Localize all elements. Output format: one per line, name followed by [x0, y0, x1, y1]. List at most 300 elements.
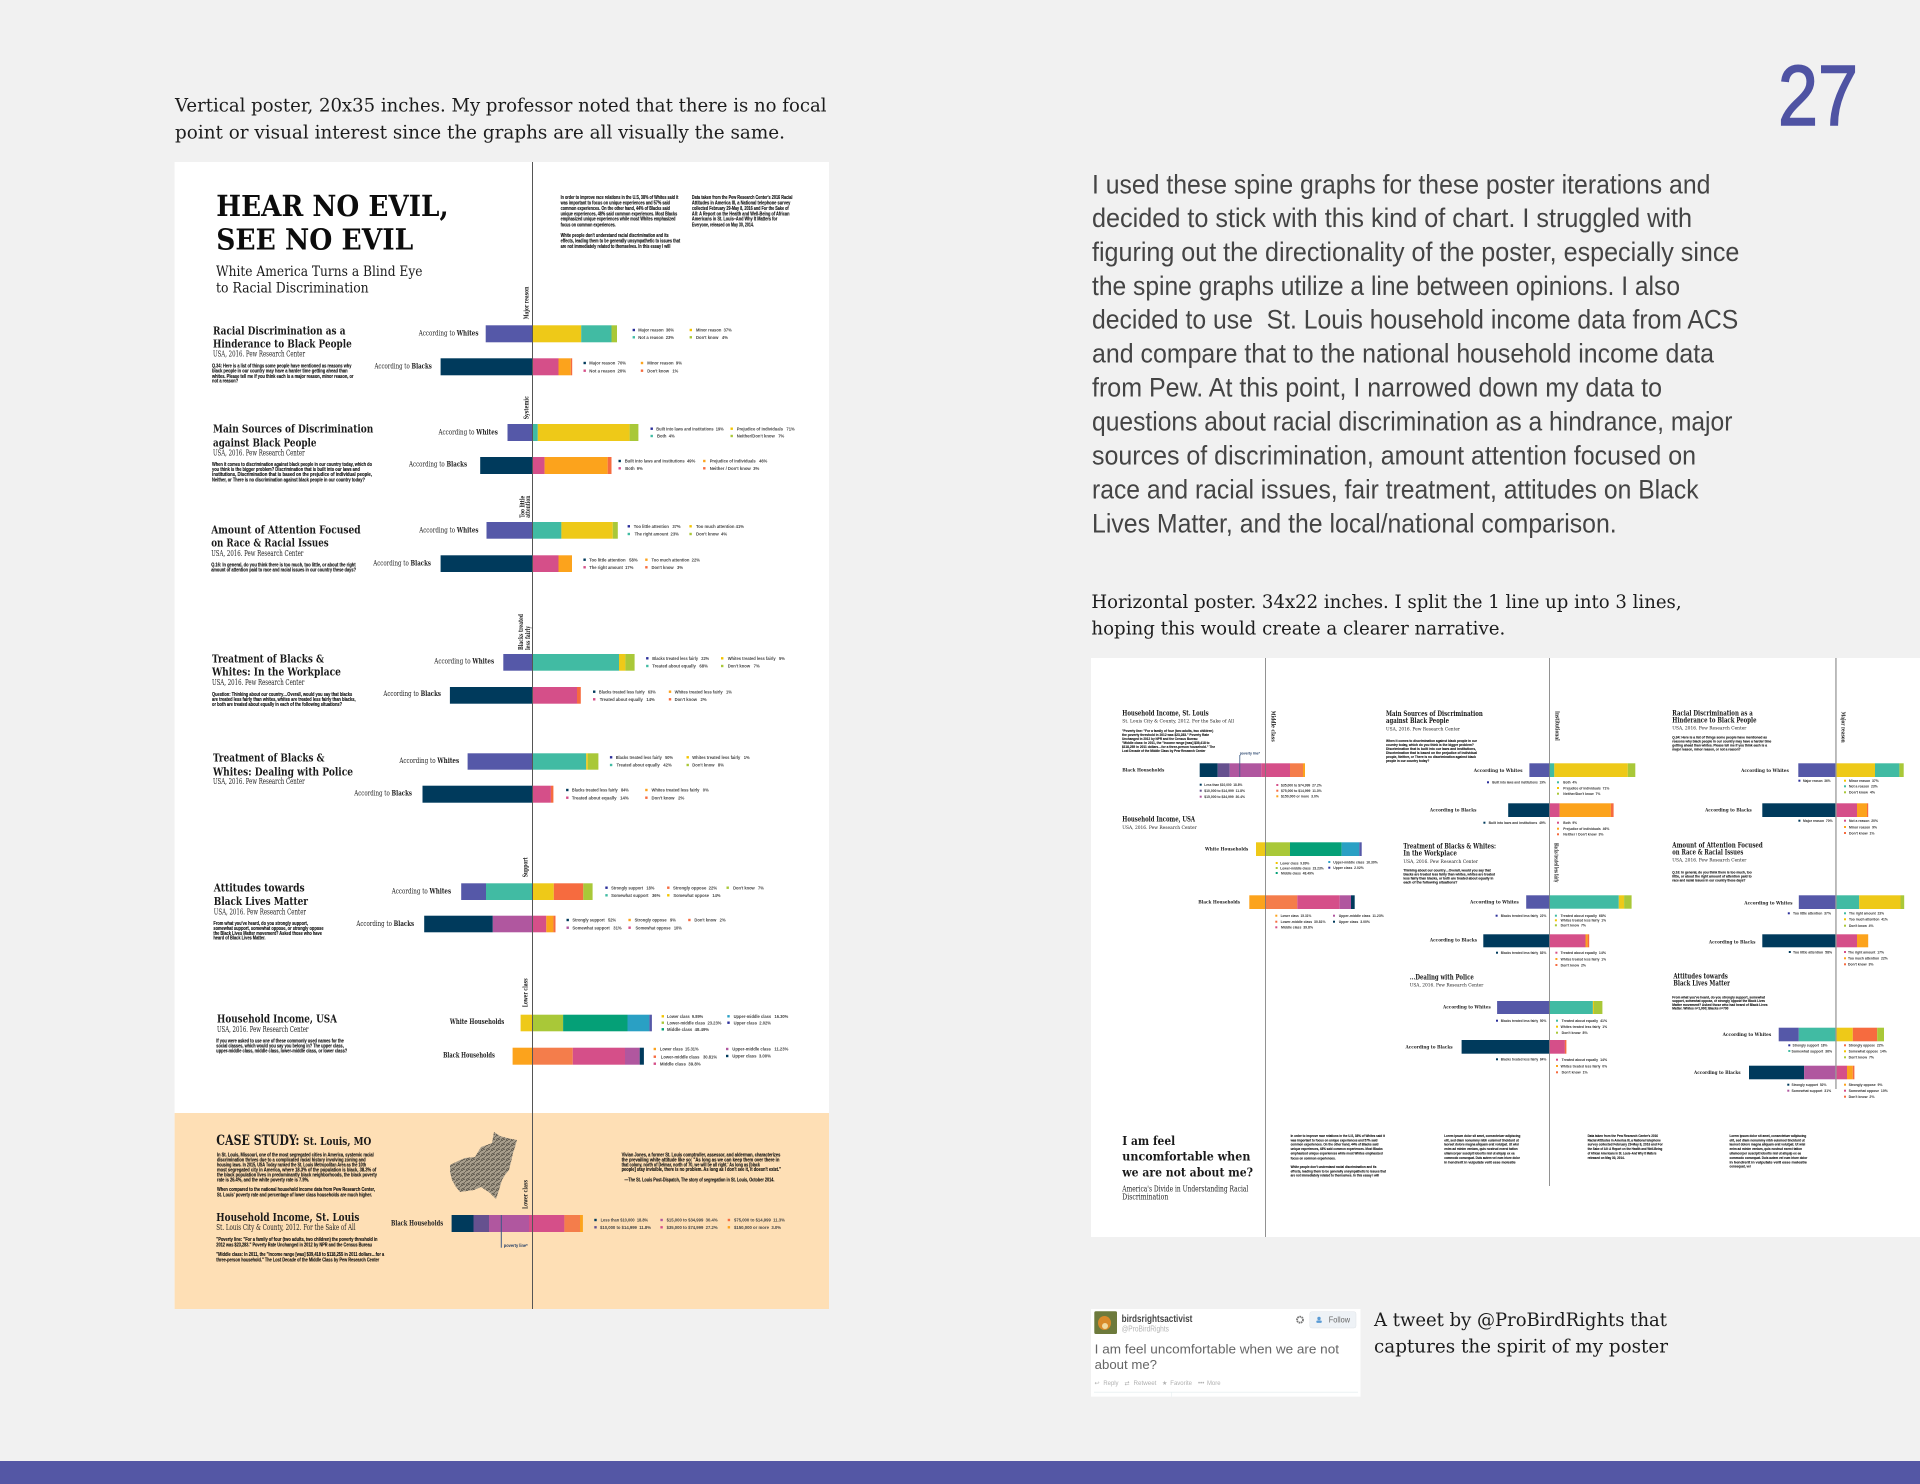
text column 2: enim ad minim veniam, quis nostrud exerci tation: [1444, 1147, 1518, 1151]
text column 1: are not immediately related to themselves. In this essay I will: [1291, 1174, 1379, 1178]
bar: according to whites: According to Whites: [1469, 900, 1519, 906]
st louis heading: [216, 1211, 359, 1232]
text column 3: released on May 30, 2014.: [1588, 1156, 1625, 1160]
question text: Matter. Whites n=1,000; Blacks n=700: [1672, 1007, 1728, 1011]
legend: whites: [633, 328, 732, 340]
heading: USA, 2016. Pew Research Center: [1410, 983, 1484, 989]
question text: From what you've heard, do you strongly support,: [213, 921, 308, 927]
bar: according to whites: [1740, 763, 1904, 777]
icon: settings gear: [1297, 1317, 1303, 1323]
tweet card: [1091, 1309, 1360, 1397]
question text: social classes, which would you say you belong in? The upper class,: [216, 1044, 344, 1050]
question text: From what you've heard, do you strongly support, somewhat: [1672, 995, 1766, 999]
heading: USA, 2016. Pew Research Center: [1672, 726, 1747, 732]
legend: blacks: Blacks treated less fairly 84%: [1501, 1058, 1546, 1062]
question text: [212, 462, 373, 483]
heading: Hinderance to Black People: [1672, 716, 1757, 725]
legend: blacks: Don't know 1%: [647, 368, 678, 373]
legend: blacks: Too little attention 58%: [589, 557, 638, 562]
bar: according to whites: [1469, 895, 1632, 909]
heading: USA, 2016. Pew Research Center: [211, 549, 304, 558]
intro text columns: emphasized unique experiences while most Whites emphasized: [561, 217, 676, 223]
question text: people, Neither, or There is no discrimination against black: [1386, 755, 1476, 759]
legend: whites: Whites treated less fairly 1%: [692, 755, 750, 760]
st louis heading: Household Income, St. Louis: [216, 1211, 359, 1224]
bar: according to blacks: According to Blacks: [1708, 939, 1756, 945]
bar: according to whites: [1442, 1001, 1602, 1014]
legend: blacks: Treated about equally 14%: [600, 697, 655, 702]
legend: blacks: Treated about equally 14%: [1562, 1058, 1607, 1062]
spine label: less fairly: [524, 626, 532, 650]
legend: whites: Don't know 4%: [696, 532, 727, 537]
horizontal poster title: Discrimination: [1122, 1192, 1168, 1201]
legend: black households: [1275, 914, 1384, 930]
legend: blacks: Major reason 70%: [1803, 819, 1833, 823]
legend: whites: Prejudice of individuals 71%: [1563, 786, 1609, 790]
legend: whites: Treated about equally 42%: [616, 763, 672, 768]
caption: vertical poster: Vertical poster, 20x35 inches. My professor noted that there is no focal: [174, 95, 826, 117]
legend: blacks: Strongly oppose 9%: [635, 918, 676, 923]
question text: When it comes to discrimination against black people in our: [1386, 739, 1478, 743]
case study text: the black population lives in predominantly black neighborhoods, the black poverty: [217, 1172, 377, 1178]
question text: reasons why black people in our country may have a harder time: [1672, 740, 1771, 744]
legend: whites: [628, 524, 744, 537]
case study text: discrimination thrives due to a complicated racial history involving zoning and: [217, 1157, 366, 1163]
bar: according to blacks: According to Blacks: [1429, 808, 1477, 814]
legend: blacks: Don't know 1%: [1849, 831, 1874, 835]
case study text: most segregated city in America, where 18.3% of the population is black, 38.3% of: [217, 1167, 376, 1173]
caption: vertical poster: [174, 95, 826, 143]
legend: whites: Don't know 4%: [1849, 791, 1875, 795]
text block: process description: from Pew. At this point, I narrowed down my data to: [1092, 373, 1662, 403]
intro text columns: focus on common experiences.: [561, 222, 616, 228]
legend: st louis: $10,000 to $14,999 11.8%: [1204, 789, 1245, 793]
legend: whites: Too much attention 41%: [1849, 918, 1888, 922]
spine label: Support: [522, 857, 530, 877]
question text: Q.34: Here is a list of things some people have mentioned as reasons why: [212, 364, 352, 370]
question text: Matter movement? Asked those who had heard of Black Lives: [1672, 1003, 1768, 1007]
intro text columns: [560, 195, 793, 250]
heading: usa: [1122, 815, 1197, 831]
legend: whites: Blacks treated less fairly 22%: [1501, 914, 1546, 918]
text block: process description: figuring out the directionality of the poster, especially since: [1092, 237, 1739, 267]
bar: according to whites: According to Whites: [1743, 900, 1793, 906]
legend: black households: Upper class 3.00%: [1339, 920, 1370, 924]
text column 1: was important to focus on unique experiences and 57% said: [1290, 1138, 1378, 1142]
bar: according to blacks: According to Blacks: [1429, 938, 1477, 944]
panel: horizontal poster: [1091, 658, 1920, 1237]
question text: major reason, minor reason, or not a reason?: [1672, 748, 1741, 752]
heading: Household Income, USA: [217, 1013, 337, 1026]
tweet actions: •••: [1198, 1381, 1204, 1387]
legend: whites: [1788, 912, 1888, 928]
text column 2: elit, sed diam nonummy nibh euismod tincidunt ut: [1444, 1138, 1519, 1142]
legend: whites: [1788, 1044, 1887, 1060]
legend: whites: Both 4%: [657, 434, 675, 439]
chart: amount of attention: [210, 496, 744, 573]
legend: blacks: Somewhat support 31%: [1792, 1089, 1831, 1093]
legend: blacks: Too little attention 58%: [1793, 950, 1832, 954]
legend: blacks: [583, 557, 700, 570]
bar: st louis: Black Households: [1122, 767, 1164, 773]
legend: white households: [662, 1014, 788, 1032]
legend: blacks: Blacks treated less fairly 63%: [599, 689, 656, 694]
legend: whites: Don't know 8%: [1562, 1031, 1588, 1035]
bar: white households: White Households: [1204, 847, 1248, 853]
legend: whites: [1487, 781, 1609, 796]
bar: black households: Black Households: [1198, 900, 1240, 906]
question text: If you were asked to use one of these commonly used names for the: [216, 1039, 344, 1045]
heading: Racial Discrimination as a: [1672, 708, 1753, 717]
legend: blacks: Not a reason 20%: [589, 368, 626, 373]
icon: bird avatar: [1094, 1311, 1117, 1334]
chart: dealing with police: [212, 751, 750, 803]
question text: When it comes to discrimination against black people in our country today, which do: [212, 462, 372, 468]
tweet actions: Reply: [1103, 1381, 1118, 1387]
heading: St. Louis City & County, 2012. For the Sake of All: [1122, 719, 1234, 725]
intro text columns: are not immediately related to themselves. In this essay I will: [561, 244, 671, 250]
footer band: [0, 1461, 1920, 1484]
legend: whites: [1496, 914, 1606, 928]
bar: according to blacks: [1429, 803, 1614, 817]
intro text columns: White people don't understand racial discrimination and its: [561, 233, 669, 239]
bar: according to blacks: [408, 457, 612, 474]
text block: process description: sources of discrimination, amount attention focused on: [1092, 441, 1696, 471]
legend: whites: Treated about equally 41%: [1562, 1019, 1607, 1023]
legend: blacks: [566, 788, 709, 800]
poster title: [216, 189, 449, 297]
heading: on Race & Racial Issues: [1672, 848, 1743, 857]
bar: according to whites: According to Whites: [438, 428, 498, 437]
question text: people in our country today?: [1386, 759, 1429, 763]
heading: USA, 2016. Pew Research Center: [213, 448, 305, 457]
tweet actions: ★: [1162, 1380, 1167, 1387]
text column 4: elit, sed diam nonummy nibh euismod tincidunt ut: [1730, 1138, 1805, 1142]
bar: black households: [443, 1048, 644, 1065]
caption: tweet: [1373, 1309, 1669, 1358]
legend: blacks: Strongly support 52%: [572, 918, 616, 923]
notes: Lost Decade of the Middle Class by Pew Research Center: [1122, 749, 1206, 753]
poster title: HEAR NO EVIL,: [216, 189, 449, 223]
legend: whites: [605, 885, 764, 898]
legend: whites: Somewhat support 36%: [1792, 1049, 1832, 1053]
text block: process description: decided to use St. Louis household income data from ACS: [1092, 304, 1738, 334]
heading: Main Sources of Discrimination: [213, 423, 373, 436]
heading: In the Workplace: [1403, 849, 1457, 858]
legend: blacks: Whites treated less fairly 0%: [652, 788, 709, 793]
text column 3: of African Americans in St. Louis–And Why It Matters: [1588, 1152, 1656, 1156]
legend: whites: Don't know 7%: [728, 664, 760, 669]
question text: country today, which do you think is the bigger problem?: [1386, 743, 1474, 747]
legend: st louis: $15,000 to $34,999 30.4%: [1204, 795, 1245, 799]
follow button: Follow: [1329, 1316, 1350, 1324]
heading: Racial Discrimination as a: [213, 324, 346, 337]
question text: [1672, 871, 1752, 883]
text column 1: White people don't understand racial discrimination and its: [1291, 1165, 1376, 1169]
bar: st louis black households: [391, 1215, 583, 1232]
text column 4: commodo consequat. Duis autem vel eum iriure dolor: [1730, 1156, 1808, 1160]
legend: blacks: [1789, 950, 1888, 967]
legend: whites: Somewhat support 36%: [611, 893, 660, 898]
question text: [213, 921, 324, 942]
legend: blacks: Built into laws and institutions 49%: [1489, 821, 1546, 825]
legend: whites: Don't know 7%: [733, 885, 764, 890]
legend: white households: [1276, 860, 1378, 875]
text column 1: In order to improve race relations in the U.S, 38% of Whites said it: [1291, 1134, 1386, 1138]
legend: whites: Treated about equally 68%: [652, 664, 708, 669]
tweet actions: Favorite: [1170, 1381, 1193, 1387]
quote: that colony, north of Delmar, north of 70, we will be all right.' As long as [black: [622, 1163, 760, 1169]
spine label: Middle class: [1269, 711, 1275, 742]
bar: according to blacks: According to Blacks: [1693, 1070, 1741, 1076]
legend: blacks: [1483, 821, 1609, 837]
legend: blacks: Neither / Don't know 3%: [1563, 833, 1604, 837]
legend: blacks: Prejudice of individuals 46%: [1563, 827, 1609, 831]
legend: black households: Lower-middle class 30.81%: [1281, 920, 1326, 924]
caption: tweet: A tweet by @ProBirdRights that: [1373, 1309, 1667, 1331]
bar: according to whites: According to Whites: [1473, 768, 1523, 774]
spine label: Blacks treated less fairly: [1552, 843, 1558, 883]
spine label: Lower class: [521, 978, 529, 1007]
legend: st louis: Less than $10,000 18.8%: [1204, 783, 1242, 787]
legend: st louis: [594, 1218, 785, 1230]
legend: whites: Blacks treated less fairly 22%: [652, 656, 709, 661]
text column 4: enim ad minim veniam, quis nostrud exerci tation: [1730, 1147, 1802, 1151]
bar: white households: [449, 1015, 652, 1031]
question text: amount of attention paid to race and racial issues in our country these days?: [211, 567, 356, 573]
legend: whites: Not a reason 23%: [638, 335, 674, 340]
legend: blacks: Don't know 1%: [1562, 1071, 1588, 1075]
legend: white households: Middle class 48.49%: [1281, 871, 1314, 875]
legend: whites: Major reason 36%: [1803, 779, 1831, 783]
heading: Treatment of Blacks & Whites:: [1403, 841, 1496, 850]
question text: Thinking about our country…Overall, would you say that: [1403, 869, 1491, 873]
legend: whites: Minor reason 37%: [696, 328, 732, 333]
question text: Discrimination that is built into our laws and institutions,: [1386, 747, 1476, 751]
heading: Attitudes towards: [1673, 972, 1728, 981]
question text: Discrimination that is based on the prejudice of individual: [1386, 751, 1477, 755]
legend: whites: Strongly oppose 22%: [673, 885, 717, 890]
question text: race and racial issues in our country these days?: [1672, 879, 1745, 883]
legend: blacks: Minor reason 9%: [1849, 825, 1877, 829]
bar: according to whites: According to Whites: [434, 656, 494, 665]
legend: blacks: The right amount 17%: [589, 565, 633, 570]
legend: black households: Upper class 3.00%: [732, 1054, 771, 1059]
legend: st louis: $10,000 to $14,999 11.8%: [600, 1225, 651, 1230]
legend: whites: The right amount 23%: [635, 532, 679, 537]
text block: process description: questions about racial discrimination as a hindrance, major: [1092, 407, 1732, 437]
legend: blacks: The right amount 17%: [1848, 950, 1884, 954]
heading: [1672, 708, 1757, 732]
poverty line marker: poverty line*: [504, 1243, 528, 1248]
heading: USA, 2016. Pew Research Center: [212, 678, 304, 687]
tweet author: @ProBirdRights: [1122, 1323, 1169, 1333]
tweet actions: [1094, 1380, 1221, 1387]
spine label: Too little: [518, 496, 526, 518]
chart: treatment in the workplace: [211, 614, 785, 708]
heading: [213, 324, 352, 359]
question text: heard of Black Lives Matter.: [213, 936, 266, 942]
bar: black households: Black Households: [443, 1050, 495, 1059]
question text: getting ahead than whites. Please tell me if you think each is a: [1672, 744, 1768, 748]
legend: blacks: [1496, 951, 1606, 967]
legend: whites: Major reason 36%: [638, 328, 674, 333]
heading: on Race & Racial Issues: [211, 537, 329, 550]
tweet actions: ⇄: [1124, 1380, 1130, 1387]
legend: blacks: Too much attention 22%: [1848, 957, 1888, 961]
bar: according to blacks: According to Blacks: [356, 919, 414, 928]
notes: "Middle class: In 2011, the "income range [was] $39,418 to: [1122, 741, 1210, 745]
legend: whites: Built into laws and institutions 19%: [656, 426, 724, 431]
legend: blacks: Somewhat oppose 10%: [1849, 1089, 1888, 1093]
heading: [211, 652, 341, 687]
tweet text: about me?: [1095, 1357, 1157, 1372]
follow button: [1310, 1312, 1356, 1328]
text block: process description: race and racial issues, fair treatment, attitudes on Black: [1092, 475, 1699, 505]
bar: according to whites: According to Whites: [391, 886, 451, 895]
bar: according to whites: According to Whites: [418, 525, 479, 534]
question text: whites. Please tell me if you think each is a major reason, minor reason, or: [211, 374, 354, 380]
notes: the poverty threshold in 2012 was $23,283." Poverty Rate: [1122, 733, 1209, 737]
heading: [213, 423, 373, 457]
bar: according to blacks: [1693, 1066, 1854, 1079]
heading: [217, 1013, 337, 1034]
text block: process description: [1092, 169, 1739, 538]
legend: whites: Don't know 4%: [696, 335, 728, 340]
bar: according to blacks: [373, 555, 572, 572]
legend: white households: Lower class 9.89%: [667, 1014, 703, 1019]
notes: $118,255 in 2011 dollars…for a three-person household." The: [1122, 745, 1215, 749]
bar: according to whites: [391, 883, 593, 900]
legend: whites: Don't know 8%: [692, 763, 724, 768]
spine label: Lower class: [522, 1180, 530, 1209]
text column 3: [1588, 1134, 1663, 1160]
heading: USA, 2016. Pew Research Center: [1403, 859, 1479, 865]
caption: horizontal poster: [1091, 591, 1682, 640]
horizontal poster title: uncomfortable when: [1122, 1149, 1250, 1164]
question text: little, or about the right amount of attention paid to: [1672, 875, 1752, 879]
legend: blacks: Somewhat support 31%: [572, 925, 622, 930]
legend: blacks: Too much attention 22%: [652, 557, 700, 562]
bar: according to blacks: [356, 916, 556, 932]
question text: Question: Thinking about our country…Overall, would you say that blacks: [212, 692, 352, 698]
column: treatment in the workplace: [1403, 841, 1632, 967]
st louis notes: three-person household." The Lost Decade of the Middle Class by Pew Research Center: [216, 1257, 379, 1263]
legend: whites: Not a reason 23%: [1849, 785, 1878, 789]
heading: USA, 2016. Pew Research Center: [1672, 858, 1747, 864]
legend: blacks: Treated about equally 14%: [572, 795, 629, 800]
question text: Q.16: In general, do you think there is too much, too little, or about the right: [211, 562, 356, 568]
bar: according to blacks: [354, 786, 553, 803]
horizontal poster title: we are not about me?: [1121, 1164, 1253, 1179]
legend: black households: [654, 1047, 788, 1066]
bar: st louis black households: Black Households: [391, 1218, 443, 1227]
quote: [622, 1153, 782, 1183]
legend: whites: [646, 656, 785, 669]
text column 2: in hendrerit in vulputate velit esse molestie: [1444, 1160, 1516, 1164]
legend: whites: [650, 426, 795, 439]
heading: USA, 2016. Pew Research Center: [214, 907, 306, 916]
question text: [1386, 739, 1478, 763]
bar: according to blacks: According to Blacks: [373, 559, 431, 568]
question text: [216, 1039, 347, 1055]
chart: household income usa: [216, 978, 788, 1066]
question text: Q.16: In general, do you think there is too much, too: [1672, 871, 1752, 875]
legend: black households: Lower-middle class 30.81%: [661, 1054, 717, 1059]
question text: [1672, 736, 1771, 752]
legend: whites: [1798, 779, 1879, 795]
column: main sources of discrimination: [1386, 709, 1635, 837]
legend: blacks: [593, 689, 732, 702]
spine label: [518, 496, 532, 518]
bar: according to blacks: [374, 358, 572, 375]
legend: white households: Upper-middle class 16.30%: [734, 1014, 788, 1019]
text column 2: [1444, 1134, 1520, 1164]
legend: white households: Upper-middle class 16.30%: [1333, 860, 1378, 864]
legend: blacks: Blacks treated less fairly 84%: [572, 788, 629, 793]
heading: Black Lives Matter: [214, 895, 308, 908]
column: dealing with police: [1405, 972, 1607, 1075]
heading: Main Sources of Discrimination: [1386, 709, 1483, 718]
bar: according to blacks: According to Blacks: [1405, 1044, 1453, 1050]
intro text columns: In order to improve race relations in the U.S, 38% of Whites said it: [561, 195, 679, 201]
legend: st louis: $150,000 or more 3.0%: [1281, 795, 1319, 799]
spine label: Institutional: [1553, 711, 1559, 741]
spine label: [517, 614, 532, 650]
legend: blacks: [566, 918, 726, 930]
question text: or both are treated about equally in each of the following situations?: [212, 702, 342, 708]
question text: [211, 562, 356, 573]
legend: blacks: Don't know 2%: [675, 697, 707, 702]
bar: according to whites: [438, 424, 638, 441]
legend: whites: Whites treated less fairly 5%: [728, 656, 785, 661]
text block: process description: Lives Matter, and the local/national comparison.: [1092, 508, 1617, 538]
legend: black households: Lower class 15.31%: [660, 1047, 699, 1052]
bar: according to whites: [434, 654, 635, 671]
horizontal poster title: I am feel: [1122, 1133, 1175, 1148]
bar: according to whites: [418, 325, 617, 342]
intro text columns: was important to focus on unique experiences and 57% said: [560, 201, 670, 207]
legend: black households: Upper-middle class 11.23%: [1339, 914, 1384, 918]
legend: blacks: Whites treated less fairly 0%: [1561, 1064, 1607, 1068]
column: amount of attention: [1672, 841, 1904, 967]
legend: black households: Upper-middle class 11.23%: [732, 1047, 788, 1052]
heading: usa: USA, 2016. Pew Research Center: [1122, 825, 1197, 831]
text column 1: emphasized unique experiences while most Whites emphasized: [1291, 1152, 1383, 1156]
legend: blacks: [1496, 1058, 1607, 1075]
panel: vertical poster: [175, 162, 829, 1309]
legend: st louis: $75,000 to $14,999 11.3%: [1281, 789, 1322, 793]
tweet actions: Retweet: [1134, 1381, 1157, 1387]
chart: attitudes towards black lives matter: [213, 857, 764, 942]
legend: whites: Don't know 7%: [1561, 924, 1586, 928]
caption: tweet: captures the spirit of my poster: [1374, 1336, 1669, 1358]
legend: st louis: Less than $10,000 18.8%: [601, 1218, 648, 1223]
tweet author: birdsrightsactivist: [1122, 1314, 1193, 1325]
caption: horizontal poster: hoping this would create a clearer narrative.: [1091, 618, 1505, 640]
notes: "Poverty line: "For a family of four (two adults, two children): [1122, 729, 1214, 733]
legend: st louis: $35,000 to $74,999 27.2%: [1281, 783, 1322, 787]
legend: blacks: Both 9%: [1563, 821, 1577, 825]
heading: [1386, 709, 1483, 732]
legend: st louis: [1200, 783, 1322, 799]
text column 1: focus on common experiences.: [1291, 1156, 1336, 1160]
caption: vertical poster: point or visual interest since the graphs are all visually the same.: [175, 121, 785, 143]
legend: whites: [610, 755, 750, 768]
heading: [210, 523, 361, 558]
text block: process description: the spine graphs utilize a line between opinions. I also: [1092, 271, 1680, 301]
st louis notes: "Poverty line: "For a family of four (two adults, two children) the poverty threshold in: [216, 1237, 378, 1243]
